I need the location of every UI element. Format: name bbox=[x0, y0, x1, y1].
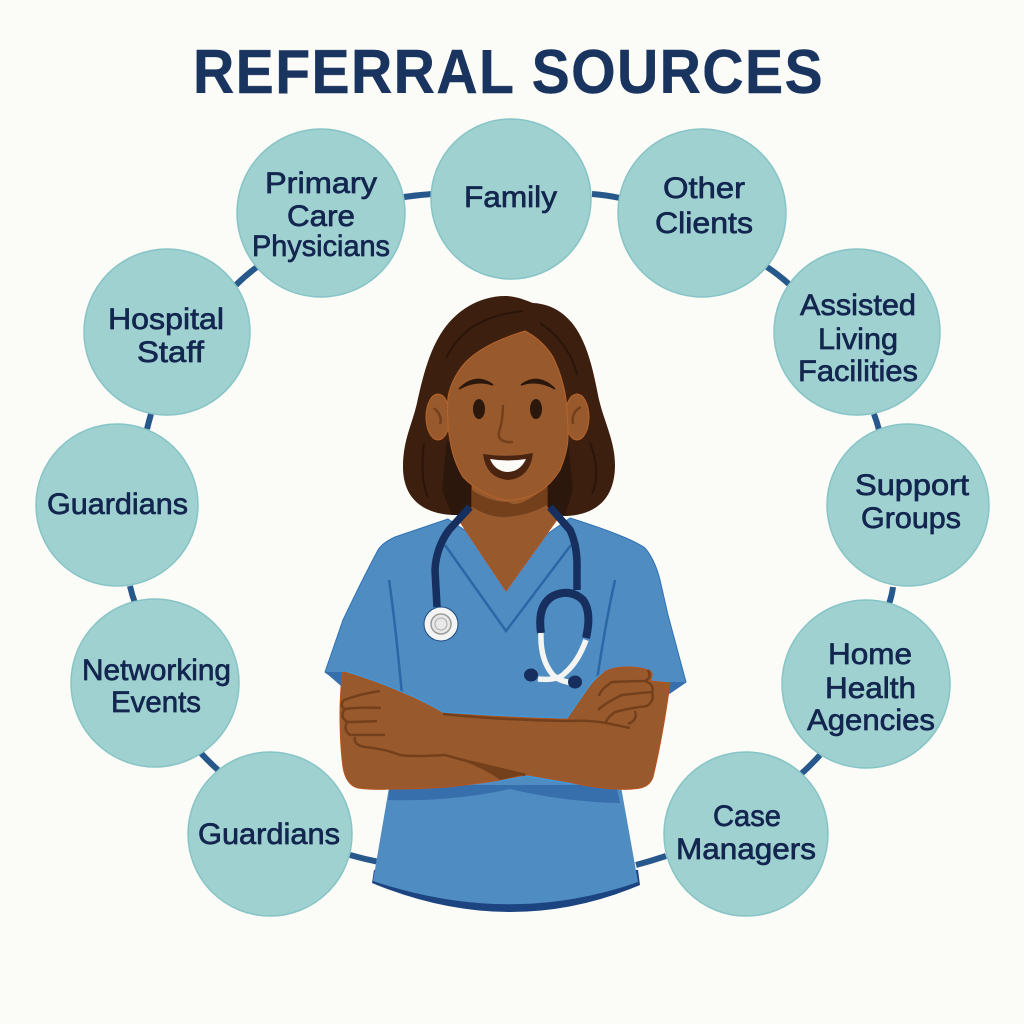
node: Case Managers: Managers bbox=[676, 833, 816, 866]
title: REFERRAL SOURCES bbox=[193, 38, 824, 107]
stethoscope loop bbox=[540, 593, 588, 638]
hair bbox=[403, 296, 615, 516]
stethoscope tips bbox=[524, 668, 582, 688]
neck shadow bbox=[472, 485, 547, 517]
node: Home Health Agencies: Home bbox=[828, 638, 912, 671]
node: Primary Care Physicians: Primary bbox=[265, 167, 377, 200]
node: Other Clients bbox=[618, 129, 786, 297]
node: Assisted Living Facilities bbox=[774, 249, 940, 415]
node: Guardians bottom bbox=[188, 752, 352, 916]
node: Guardians bottom: Guardians bbox=[198, 818, 340, 851]
sleeve shadows bbox=[325, 672, 686, 694]
node: Assisted Living Facilities: Facilities bbox=[798, 355, 918, 388]
node: Assisted Living Facilities: Living bbox=[818, 323, 898, 356]
arm edge highlight bbox=[345, 671, 603, 784]
teeth bbox=[490, 459, 526, 472]
node: Assisted Living Facilities: Assisted bbox=[800, 289, 916, 322]
scrub upper body bbox=[325, 518, 686, 775]
node: Primary Care Physicians bbox=[237, 129, 405, 297]
face bbox=[448, 331, 568, 500]
waist shadow bbox=[388, 785, 620, 803]
node: Support Groups bbox=[827, 424, 989, 586]
stethoscope tubing bbox=[435, 507, 577, 607]
eyes bbox=[473, 399, 542, 419]
node: Other Clients: Clients bbox=[655, 207, 753, 240]
node: Networking Events: Networking bbox=[82, 654, 231, 687]
ear details bbox=[434, 407, 581, 424]
node: Hospital Staff: Staff bbox=[137, 336, 205, 369]
hair strands bbox=[423, 311, 596, 497]
node: Primary Care Physicians: Care bbox=[287, 200, 355, 233]
scrub collar and seams bbox=[389, 545, 615, 695]
connector ring bbox=[130, 194, 893, 865]
nurse illustration bbox=[325, 296, 686, 912]
node: Networking Events bbox=[71, 599, 239, 767]
nose bbox=[499, 405, 513, 442]
node: Other Clients: Other bbox=[663, 172, 745, 205]
stethoscope white tubes bbox=[538, 633, 586, 683]
node: Guardians left bbox=[36, 424, 198, 586]
mouth bbox=[483, 453, 533, 480]
hair shadow bbox=[442, 440, 573, 515]
node: Home Health Agencies bbox=[782, 600, 950, 768]
node: Family: Family bbox=[464, 181, 557, 214]
crossed arms bbox=[340, 667, 670, 789]
arm crease shadow bbox=[447, 755, 527, 780]
hand and finger lines bbox=[342, 670, 653, 775]
node: Home Health Agencies: Agencies bbox=[807, 704, 935, 737]
node: Networking Events: Events bbox=[111, 686, 201, 719]
node: Case Managers: Case bbox=[713, 800, 781, 833]
eyebrows bbox=[459, 379, 555, 389]
ears bbox=[426, 394, 589, 440]
node: Primary Care Physicians: Physicians bbox=[252, 230, 390, 263]
scrub torso bbox=[373, 770, 638, 904]
node: Home Health Agencies: Health bbox=[825, 672, 916, 705]
node: Hospital Staff bbox=[84, 249, 250, 415]
node: Hospital Staff: Hospital bbox=[108, 303, 224, 336]
node: Family bbox=[431, 119, 591, 279]
stethoscope chest piece bbox=[424, 607, 458, 641]
neck bbox=[460, 485, 559, 591]
node: Support Groups: Groups bbox=[861, 502, 961, 535]
scrub hem bbox=[372, 870, 640, 912]
node: Case Managers bbox=[664, 752, 828, 916]
node: Guardians left: Guardians bbox=[47, 488, 188, 521]
node: Support Groups: Support bbox=[855, 469, 970, 502]
